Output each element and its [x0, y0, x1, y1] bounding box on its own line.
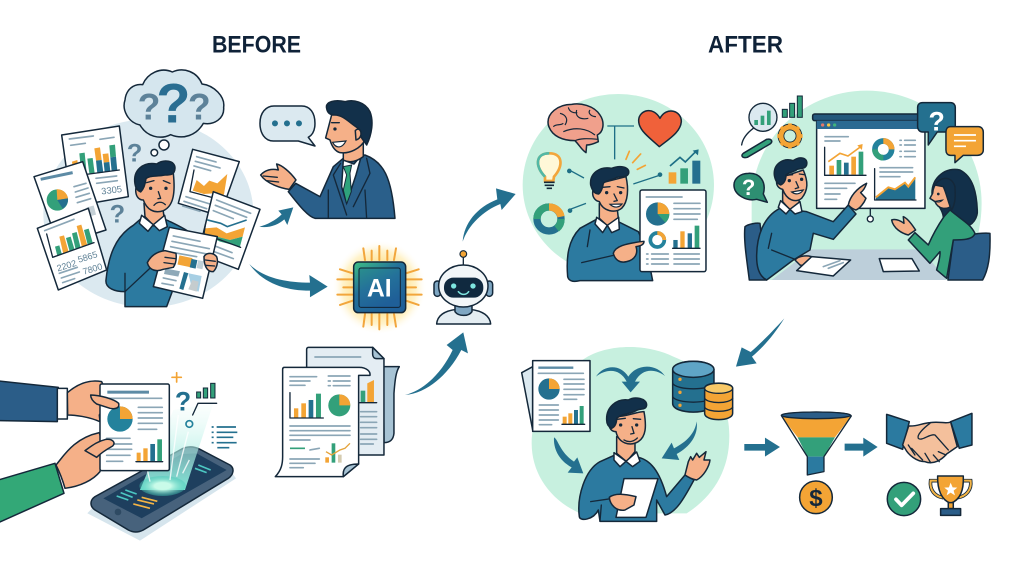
arrow: analyst to AI [249, 264, 328, 297]
hologram beam [140, 403, 213, 490]
icon: brain [548, 104, 603, 153]
person presenting [567, 167, 653, 281]
icon: smartphone [87, 447, 236, 541]
callouts: ? [928, 107, 945, 137]
pointing hand [613, 241, 644, 262]
panel: hands checking report over phone [0, 373, 237, 541]
report: bars with figures: 7800 [82, 261, 104, 277]
colleague woman [892, 169, 977, 278]
person with tablet [579, 398, 710, 521]
arrow: analyst to colleague [259, 207, 293, 227]
report: bar chart with 3305 [62, 126, 128, 207]
paper on table [797, 257, 851, 276]
icon: thought cloud with question marks [124, 70, 224, 156]
report with charts [640, 190, 706, 272]
report held by hands [100, 384, 169, 471]
icon: speech bubble [260, 106, 315, 146]
arms and hands [0, 381, 110, 523]
icon: thought cloud with question marks: ? [188, 86, 211, 128]
person: worried analyst [106, 161, 193, 307]
thumbs over report [85, 395, 119, 457]
panel: colleague in suit [260, 101, 395, 218]
report: pie chart [34, 162, 106, 245]
arrow [845, 438, 878, 457]
title: before: BEFORE [212, 32, 301, 58]
presenter [757, 158, 867, 280]
report: orange area chart [178, 149, 239, 216]
floating icons: ? [175, 387, 191, 417]
arrow [744, 438, 780, 457]
arrow: after to bottom [736, 318, 784, 367]
sparks [626, 151, 645, 169]
arrow: report to robot [405, 332, 468, 395]
panel: AFTER person with insights [523, 94, 714, 281]
icon: lightbulb [538, 153, 560, 188]
title: after: AFTER [708, 32, 783, 58]
icon: check badge [887, 482, 921, 516]
hand [261, 164, 296, 189]
report: bars with figures: 2202 [56, 258, 78, 273]
jacket [288, 155, 395, 218]
report stack [522, 361, 590, 431]
table [772, 249, 947, 280]
icon: rising bars [669, 149, 700, 184]
panel: AFTER meeting at screen [734, 91, 990, 280]
screen [813, 114, 925, 222]
panel: confused analyst with reports: ? [110, 201, 125, 229]
floating icons [172, 373, 237, 448]
icon: AI chip [332, 240, 427, 335]
report: bars with figures: 5865 [77, 249, 99, 265]
icon: handshake [887, 413, 972, 463]
callouts [918, 103, 983, 163]
icon: robot [434, 251, 493, 324]
panel: middle stacked reports [275, 347, 399, 477]
icon: dollar coin [800, 481, 832, 514]
report: held in front [153, 227, 217, 298]
icon: thought cloud with question marks: ? [138, 86, 160, 128]
icon: dollar coin: $ [809, 485, 823, 512]
icon cluster: ? [742, 175, 755, 200]
head [343, 137, 363, 162]
icon cluster [734, 96, 803, 202]
report: green area chart [198, 192, 260, 269]
panel: AFTER workflow [522, 347, 972, 521]
panel: confused analyst with reports [34, 70, 260, 307]
icon: trophy [930, 476, 971, 515]
icon: database [673, 361, 733, 420]
report: bars with figures [37, 208, 107, 290]
arrow: robot to after [463, 188, 516, 242]
icon: heart [639, 111, 681, 147]
panel: confused analyst with reports: ? [127, 140, 142, 168]
icon: thought cloud with question marks: ? [156, 72, 190, 135]
connector [568, 126, 659, 210]
icon: AI chip: AI [367, 275, 392, 302]
hands holding report [147, 251, 217, 272]
icon: donut [537, 207, 561, 231]
arrows converging [596, 367, 665, 392]
chairs [745, 223, 767, 280]
icon: funnel [781, 412, 851, 475]
report: bar chart with 3305: 3305 [101, 184, 123, 197]
